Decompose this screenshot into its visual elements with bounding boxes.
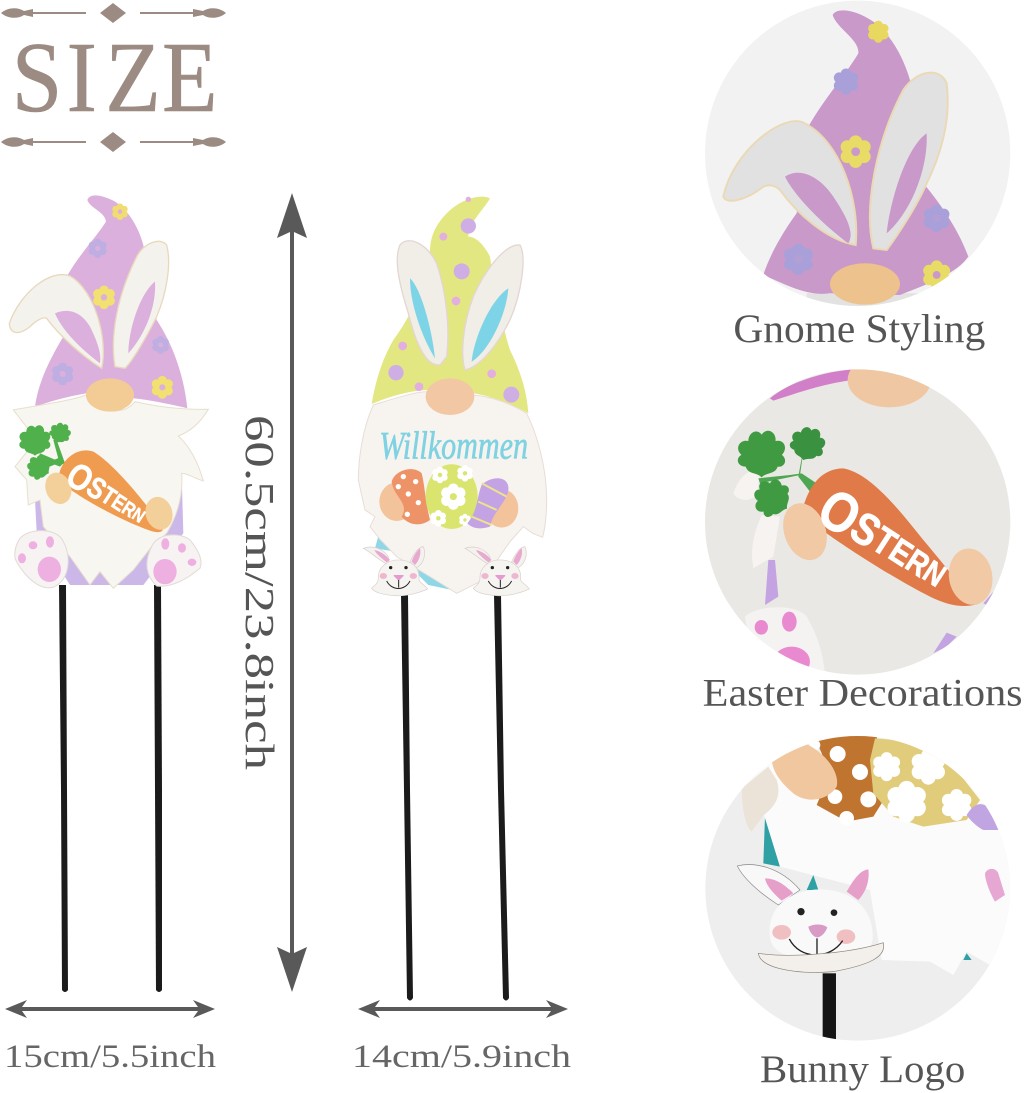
carrot close-up: R xyxy=(899,542,937,584)
caption: Gnome Styling xyxy=(733,306,985,351)
height arrow xyxy=(277,193,307,992)
bunny ears xyxy=(737,865,800,905)
carrot close-up: O xyxy=(807,477,872,550)
nose xyxy=(86,378,134,412)
carrot close-up xyxy=(733,353,998,677)
size heading with ornaments xyxy=(1,3,226,152)
blue backing xyxy=(375,530,487,592)
height label: 60.5cm/23.8inch xyxy=(237,415,283,770)
carrot label: R xyxy=(118,496,140,522)
right bunny xyxy=(465,547,529,596)
carrot close-up: T xyxy=(865,519,904,565)
width arrow: yellow gnome xyxy=(358,1000,568,1018)
bunny head xyxy=(770,889,873,960)
panel: gnome styling xyxy=(705,1,1010,351)
panel: bunny logo xyxy=(705,733,1023,1091)
heading text: SIZE xyxy=(12,21,218,133)
width label: yellow gnome: 14cm/5.9inch xyxy=(352,1039,572,1075)
left ear xyxy=(9,275,103,368)
width label: pink gnome: 15cm/5.5inch xyxy=(4,1039,217,1075)
hat flowers xyxy=(52,203,173,399)
caption: Bunny Logo xyxy=(760,1049,965,1091)
carrot close-up: N xyxy=(916,555,951,594)
yellow egg xyxy=(426,464,478,529)
hat close-up xyxy=(723,10,968,310)
carrot leaves xyxy=(19,420,73,484)
nose xyxy=(426,378,474,415)
stakes of pink gnome xyxy=(59,585,162,992)
pink gnome stake xyxy=(9,195,208,588)
carrot close-up: E xyxy=(882,530,920,574)
hat xyxy=(372,197,528,413)
ornament: top rule xyxy=(1,3,226,23)
purple backing xyxy=(35,473,183,585)
hat dots xyxy=(388,197,519,403)
width arrow: pink gnome xyxy=(5,1000,215,1018)
hat xyxy=(35,195,187,408)
right ear xyxy=(463,245,523,370)
orange egg xyxy=(392,469,430,524)
circle background xyxy=(705,1,1010,306)
panel: easter decorations xyxy=(703,353,1023,714)
beard xyxy=(358,392,547,593)
willkommen script: Willkommen xyxy=(379,425,528,467)
hands behind eggs xyxy=(379,482,414,521)
carrot label: N xyxy=(128,504,149,527)
carrot label: E xyxy=(107,490,130,517)
circle background xyxy=(705,369,1010,675)
ornament: bottom rule xyxy=(1,132,226,152)
carrot label: O xyxy=(59,455,100,502)
carrot label: T xyxy=(96,481,122,511)
beard xyxy=(13,395,208,588)
yellow gnome stake xyxy=(358,197,547,596)
stakes of yellow gnome xyxy=(401,595,509,1000)
carrot close-up: S xyxy=(842,501,890,557)
right ear xyxy=(113,241,169,368)
left bunny xyxy=(363,547,428,596)
circle background xyxy=(705,736,1010,1041)
purple egg xyxy=(467,478,508,528)
hands xyxy=(41,469,76,508)
right foot xyxy=(147,535,201,586)
carrot xyxy=(59,450,163,532)
left foot xyxy=(15,531,68,588)
carrot label: S xyxy=(81,469,113,507)
bunny close-up xyxy=(737,733,1023,1040)
left ear xyxy=(397,241,448,365)
caption: Easter Decorations xyxy=(703,672,1023,714)
